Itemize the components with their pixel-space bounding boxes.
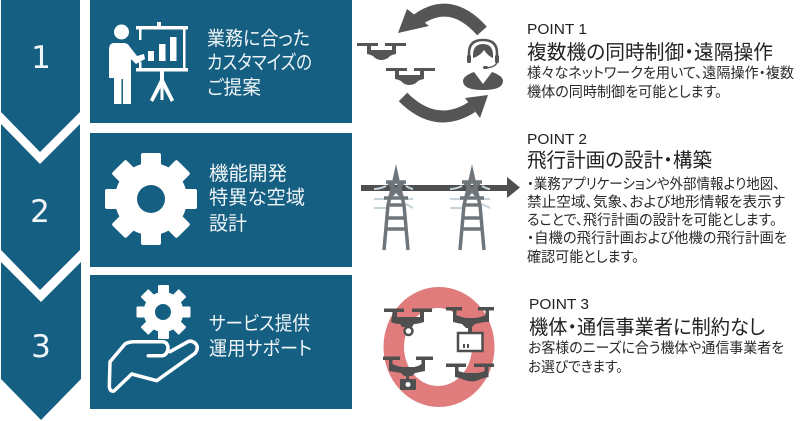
icon: remote operation loop	[357, 9, 503, 118]
text block: point 3: 機体・通信事業者に制約なし	[529, 316, 765, 339]
text block: point 2: ・自機の飛行計画および他機の飛行計画を	[527, 230, 787, 247]
drone with camera	[383, 356, 433, 390]
text: service provision: 運用サポート	[209, 338, 312, 360]
icon: operator with headset	[463, 40, 503, 90]
text block: point 2: POINT 2	[527, 132, 587, 148]
text: custom proposal	[207, 28, 312, 99]
text block: point 2: 禁止空域、気象、および地形情報を表示す	[527, 194, 785, 211]
text block: point 1: POINT 1	[527, 22, 587, 38]
ring	[384, 287, 494, 407]
step 3 chevron: 3	[31, 329, 51, 365]
icon: presenter with chart	[109, 22, 188, 104]
text block: point 1: 機体の同時制御を可能とします。	[527, 84, 722, 101]
text block: point 1	[527, 22, 794, 101]
text: feature development: 設計	[209, 213, 247, 235]
text block: point 3: お選びできます。	[528, 359, 623, 376]
text: feature development: 特異な空域	[209, 187, 305, 209]
drone with round camera	[384, 308, 432, 335]
icon: flight path arrow over pylons	[361, 164, 520, 250]
icon: gear	[105, 153, 197, 245]
text: service provision: サービス提供	[209, 313, 310, 335]
drone with parcel	[446, 307, 494, 351]
text: custom proposal: 業務に合った	[207, 28, 310, 50]
text: feature development	[209, 163, 305, 235]
arrow: operator to drones	[398, 9, 482, 33]
text: custom proposal: カスタマイズの	[207, 52, 312, 74]
step 2 chevron	[1, 124, 80, 290]
text block: point 1: 複数機の同時制御・遠隔操作	[527, 41, 773, 64]
step 2 chevron: 2	[30, 194, 50, 230]
text: feature development: 機能開発	[209, 163, 287, 185]
icon: pylon left	[374, 164, 413, 250]
step 3 chevron	[1, 262, 81, 420]
text block: point 2	[527, 132, 787, 266]
text block: point 2: 確認可能とします。	[527, 249, 639, 266]
panel: service provision	[90, 275, 352, 409]
icon: drone lower	[386, 68, 435, 85]
icon: pylon right	[450, 164, 490, 250]
icon: gear on open hand	[109, 285, 197, 391]
text block: point 2: ・業務アプリケーションや外部情報より地図、	[527, 176, 780, 193]
panel: feature development	[90, 133, 352, 267]
panel: custom proposal	[90, 0, 352, 123]
text block: point 2: 飛行計画の設計・構築	[527, 149, 712, 172]
arrow: drones to operator	[403, 95, 488, 118]
drone plain	[446, 364, 494, 382]
text: service provision	[209, 313, 312, 360]
arrow: flight path	[361, 177, 520, 198]
text block: point 1: 様々なネットワークを用いて、遠隔操作・複数	[527, 65, 794, 82]
text: custom proposal: ご提案	[207, 77, 261, 99]
text block: point 2: ることで、飛行計画の設計を可能とします。	[527, 212, 777, 229]
text block: point 3: POINT 3	[529, 297, 589, 313]
step 1 chevron: 1	[31, 40, 51, 76]
icon: drone upper	[357, 43, 406, 60]
text block: point 3: お客様のニーズに合う機体や通信事業者を	[528, 340, 784, 357]
step 1 chevron	[1, 0, 80, 152]
text block: point 3	[528, 297, 784, 376]
icon: ring of drones	[383, 287, 494, 407]
